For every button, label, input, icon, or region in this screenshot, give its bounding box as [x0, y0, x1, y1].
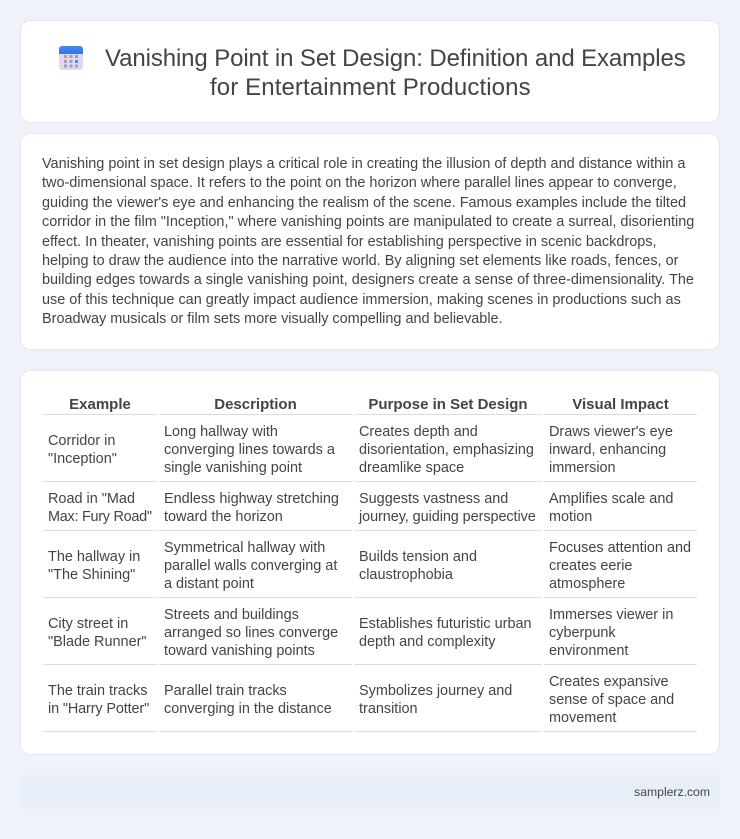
row 3 impact: atmosphere [549, 576, 625, 592]
row 1 impact: immersion [549, 460, 616, 476]
row 3 purpose: Builds tension and [359, 549, 477, 565]
row 4 impact: Immerses viewer in [549, 607, 673, 623]
panel: title card [20, 20, 720, 123]
text block: introduction: building edges towards a single vanishing point, designers create a sense of three-dimensionality. The [42, 272, 694, 288]
title [105, 45, 686, 101]
row 5 purpose [359, 683, 512, 717]
row 5 description: Parallel train tracks [164, 683, 287, 699]
row 3 example: The hallway in [48, 549, 140, 565]
text block: introduction: two-dimensional space. It refers to the point on the horizon where parallel lines appear to converge, [42, 175, 677, 191]
row 1 description [164, 424, 335, 476]
row 2 example: Max: Fury Road" [48, 509, 152, 525]
row 5 example [48, 683, 149, 717]
row 2 impact: Amplifies scale and [549, 491, 673, 507]
row 1 example [48, 433, 117, 467]
row 4 description: Streets and buildings [164, 607, 299, 623]
row 5 example: in "Harry Potter" [48, 701, 149, 717]
table header: Purpose in Set Design: Purpose in Set Design [368, 396, 528, 413]
footer bar [20, 775, 720, 809]
row 5 description: converging in the distance [164, 701, 332, 717]
row 3 description [164, 540, 338, 592]
text block: introduction: helping to draw the audience into the narrative world. By aligning set elements like roads, fences, or [42, 253, 678, 269]
row 5 purpose: transition [359, 701, 418, 717]
row 1 impact: inward, enhancing [549, 442, 666, 458]
text block: introduction: Broadway musicals or film sets more visually compelling and believable. [42, 311, 503, 327]
panel: introduction card [20, 133, 720, 350]
row 2 description: Endless highway stretching [164, 491, 339, 507]
row 4 description [164, 607, 338, 659]
row 4 purpose [359, 616, 532, 650]
row 5 impact: movement [549, 710, 616, 726]
footer: source: samplerz.com [634, 785, 710, 799]
row 1 impact [549, 424, 673, 476]
row 2 purpose: journey, guiding perspective [359, 509, 536, 525]
row 2 impact: motion [549, 509, 592, 525]
row 2 description [164, 491, 339, 525]
row 2 impact [549, 491, 673, 525]
row 5 impact: Creates expansive [549, 674, 669, 690]
row 5 impact [549, 674, 674, 726]
text block: introduction [42, 156, 694, 327]
row 4 description: toward vanishing points [164, 643, 315, 659]
row 3 description: parallel walls converging at [164, 558, 337, 574]
row 1 description: single vanishing point [164, 460, 302, 476]
row 4 impact [549, 607, 673, 659]
row 1 example: "Inception" [48, 451, 117, 467]
row 4 impact: cyberpunk [549, 625, 616, 641]
row 1 purpose [359, 424, 534, 476]
row 4 purpose: depth and complexity [359, 634, 495, 650]
row 1 purpose: Creates depth and [359, 424, 478, 440]
row 4 example [48, 616, 147, 650]
row 1 impact: Draws viewer's eye [549, 424, 673, 440]
row 3 impact: Focuses attention and [549, 540, 691, 556]
row 1 purpose: disorientation, emphasizing [359, 442, 534, 458]
table header: Example: Example [69, 396, 131, 413]
text block: introduction: guiding the viewer's eye and enhancing the realism of the scene. Famous examples include the tilted [42, 195, 686, 211]
row 1 purpose: dreamlike space [359, 460, 464, 476]
text block: introduction: use of this technique can greatly impact audience immersion, making scenes in productions such as [42, 292, 681, 308]
row 4 purpose: Establishes futuristic urban [359, 616, 532, 632]
row 2 example [48, 491, 152, 525]
row 5 impact: sense of space and [549, 692, 674, 708]
row 2 purpose [358, 491, 536, 525]
row 5 purpose: Symbolizes journey and [359, 683, 512, 699]
row 5 description [164, 683, 332, 717]
row 3 purpose: claustrophobia [359, 567, 453, 583]
text block: introduction: corridor in the film "Inception," where vanishing points are manipulated to create a surreal, disorienting [42, 214, 694, 230]
text block: introduction: Vanishing point in set design plays a critical role in creating the illusion of depth and distance within a [42, 156, 685, 172]
table header: Visual Impact: Visual Impact [572, 396, 669, 413]
title: for Entertainment Productions [210, 74, 531, 101]
row 4 example: City street in [48, 616, 128, 632]
row 3 impact [549, 540, 691, 592]
row 3 impact: creates eerie [549, 558, 632, 574]
row 3 purpose [359, 549, 477, 583]
row 5 example: The train tracks [48, 683, 148, 699]
row 2 example: Road in "Mad [48, 491, 135, 507]
row 1 description: converging lines towards a [164, 442, 335, 458]
row 2 description: toward the horizon [164, 509, 283, 525]
table header: Description: Description [214, 396, 297, 413]
row 1 description: Long hallway with [164, 424, 278, 440]
row 1 example: Corridor in [48, 433, 115, 449]
row 4 description: arranged so lines converge [164, 625, 338, 641]
panel: table card [20, 370, 720, 755]
row 4 example: "Blade Runner" [48, 634, 147, 650]
row 3 description: a distant point [164, 576, 254, 592]
row 3 example [48, 549, 140, 583]
row 3 example: "The Shining" [48, 567, 135, 583]
icon: calendar grid [59, 46, 83, 70]
row 3 description: Symmetrical hallway with [164, 540, 325, 556]
title: Vanishing Point in Set Design: Definition and Examples [105, 45, 686, 72]
row 4 impact: environment [549, 643, 628, 659]
row 2 purpose: Suggests vastness and [359, 491, 508, 507]
text block: introduction: effect. In theater, vanishing points are essential for establishing perspective in scenic backdrops, [42, 234, 656, 250]
